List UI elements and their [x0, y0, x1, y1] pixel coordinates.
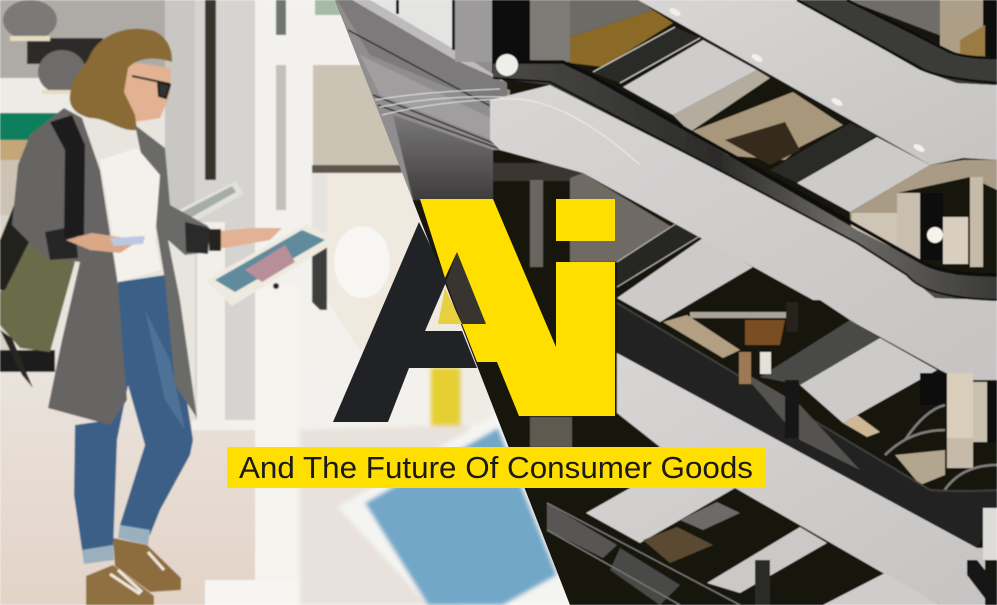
letter N in yellow [420, 199, 615, 416]
head and hair [70, 29, 172, 130]
ceiling lobes behind the main escalator [593, 27, 930, 212]
yellow sliver in the counter [438, 288, 462, 324]
right lower wall, sign and curved rails [884, 372, 997, 490]
bottom-right panel [967, 508, 997, 605]
counter of the A [446, 252, 486, 324]
jacket [12, 108, 210, 425]
lower escalator [586, 303, 997, 605]
lower-left escalators and lobe [617, 223, 753, 322]
white shirt [100, 148, 161, 282]
i dot [556, 199, 615, 241]
letter A in black [333, 222, 477, 422]
jeans [74, 275, 193, 564]
panel: store photo with woman at kiosk [0, 0, 500, 605]
warm wall right of mid level [850, 160, 997, 267]
arm and phone [66, 228, 282, 253]
bottom-left escalators [547, 502, 940, 605]
rear kiosk [175, 181, 244, 427]
pendant lamps [3, 0, 86, 94]
front kiosk [205, 224, 339, 605]
logo: AI mark [333, 199, 615, 422]
white display structure [255, 0, 500, 605]
top columns [492, 0, 680, 447]
woman [0, 29, 282, 605]
upper-right background [850, 0, 996, 58]
shoes [86, 538, 181, 605]
backpack [0, 205, 75, 388]
store background [0, 0, 460, 605]
main escalator [490, 54, 997, 380]
upper-right escalator [638, 0, 997, 165]
panel: shopping mall with escalators [335, 0, 997, 605]
bag strap [50, 115, 85, 238]
title banner: And The Future Of Consumer Goods [239, 451, 753, 485]
panel: blurred foreground tablet near the split [300, 368, 575, 605]
black void with store lights [662, 300, 850, 359]
upper-left ceiling and beams [335, 0, 510, 200]
mid escalator and right lobe [760, 320, 937, 437]
shoppers [739, 302, 799, 605]
